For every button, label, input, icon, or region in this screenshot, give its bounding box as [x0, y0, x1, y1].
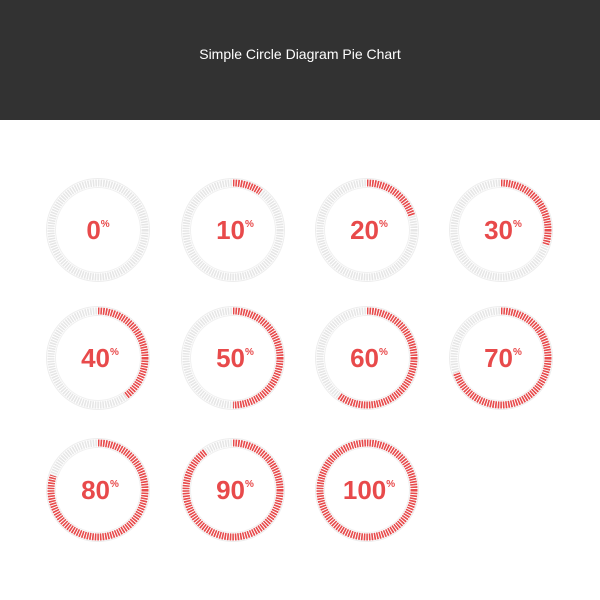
chart: 50%: % — [245, 347, 254, 358]
chart: 10%: 10 — [216, 215, 245, 245]
chart: 20%: % — [379, 219, 388, 230]
chart: 100%: 100 — [343, 475, 386, 505]
chart: 0%: % — [101, 219, 110, 230]
chart: 90%: 90 — [216, 475, 245, 505]
title: Simple Circle Diagram Pie Chart — [199, 46, 401, 62]
chart: 80% — [46, 438, 150, 542]
chart: 100% — [316, 438, 418, 542]
chart: 0% — [46, 178, 150, 282]
chart: 20% — [316, 178, 418, 282]
chart: 60%: % — [379, 347, 388, 358]
chart: 90%: % — [245, 479, 254, 490]
chart: 40% — [46, 306, 150, 410]
chart: 30% — [450, 178, 552, 282]
chart: 50%: 50 — [216, 343, 245, 373]
chart: 60% — [316, 306, 418, 410]
header band — [0, 0, 600, 120]
chart: 10% — [182, 178, 284, 282]
chart: 20%: 20 — [350, 215, 379, 245]
chart: 80%: % — [110, 479, 119, 490]
chart: 40%: 40 — [81, 343, 110, 373]
chart: 60%: 60 — [350, 343, 379, 373]
chart: 40%: % — [110, 347, 119, 358]
chart: 90% — [182, 438, 284, 542]
chart: 30%: % — [513, 219, 522, 230]
chart: 100%: % — [386, 479, 395, 490]
chart: 30%: 30 — [484, 215, 513, 245]
chart: 70%: % — [513, 347, 522, 358]
chart: 70% — [450, 306, 552, 410]
chart: 80%: 80 — [81, 475, 110, 505]
chart: 70%: 70 — [484, 343, 513, 373]
chart: 10%: % — [245, 219, 254, 230]
chart: 50% — [182, 306, 284, 410]
chart: 0%: 0 — [86, 215, 101, 245]
